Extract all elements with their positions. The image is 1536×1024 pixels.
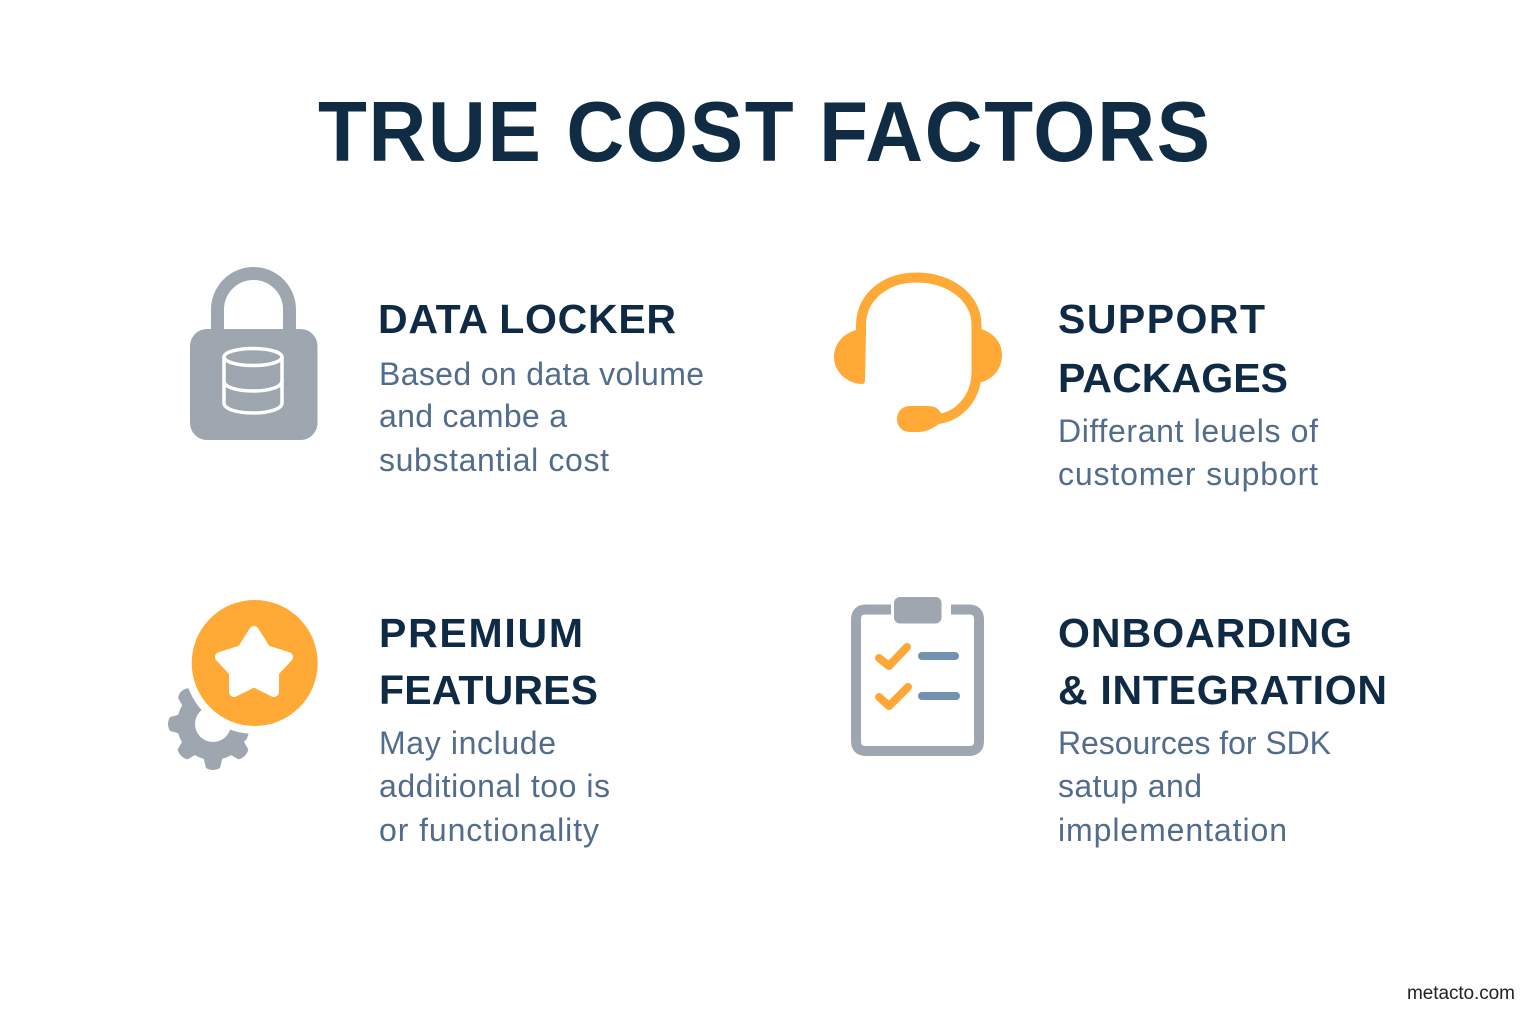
icon: clipboard checklist xyxy=(856,597,979,751)
description: data locker: and cambe a xyxy=(379,398,567,434)
heading: support packages xyxy=(1058,296,1288,401)
description: support packages: Differant leuels of xyxy=(1058,413,1318,449)
description: support packages xyxy=(1058,413,1318,492)
description: premium features: additional too is xyxy=(379,768,610,804)
description: data locker xyxy=(379,356,704,478)
icon: padlock with database xyxy=(190,274,318,440)
description: support packages: customer supbort xyxy=(1058,456,1318,492)
heading: premium features: FEATURES xyxy=(379,667,598,713)
heading: support packages: SUPPORT xyxy=(1058,296,1265,342)
panel: data locker xyxy=(190,274,704,478)
description: premium features: or functionality xyxy=(379,812,599,848)
description: onboarding and integration: implementation xyxy=(1058,812,1287,848)
description: data locker: substantial cost xyxy=(379,442,609,478)
description: premium features xyxy=(379,725,610,848)
heading: data locker: DATA LOCKER xyxy=(378,296,676,342)
heading: support packages: PACKAGES xyxy=(1058,355,1288,401)
heading: premium features xyxy=(379,610,598,713)
panel: onboarding and integration xyxy=(856,597,1387,848)
title: TRUE COST FACTORS xyxy=(318,84,1210,180)
panel: support packages xyxy=(834,278,1318,492)
description: onboarding and integration: satup and xyxy=(1058,768,1202,804)
heading: onboarding and integration xyxy=(1058,610,1387,713)
panel: premium features xyxy=(168,592,610,848)
description: premium features: May include xyxy=(379,725,556,761)
description: onboarding and integration xyxy=(1058,725,1331,848)
icon: headset xyxy=(834,278,1002,432)
watermark: metacto.com: metacto.com xyxy=(1407,983,1515,1004)
heading: onboarding and integration: & INTEGRATION xyxy=(1058,667,1387,713)
heading: onboarding and integration: ONBOARDING xyxy=(1058,610,1352,656)
heading: premium features: PREMIUM xyxy=(379,610,583,656)
description: onboarding and integration: Resources for SDK xyxy=(1058,725,1331,761)
icon: star badge with gear xyxy=(168,592,326,770)
description: data locker: Based on data volume xyxy=(379,356,704,392)
